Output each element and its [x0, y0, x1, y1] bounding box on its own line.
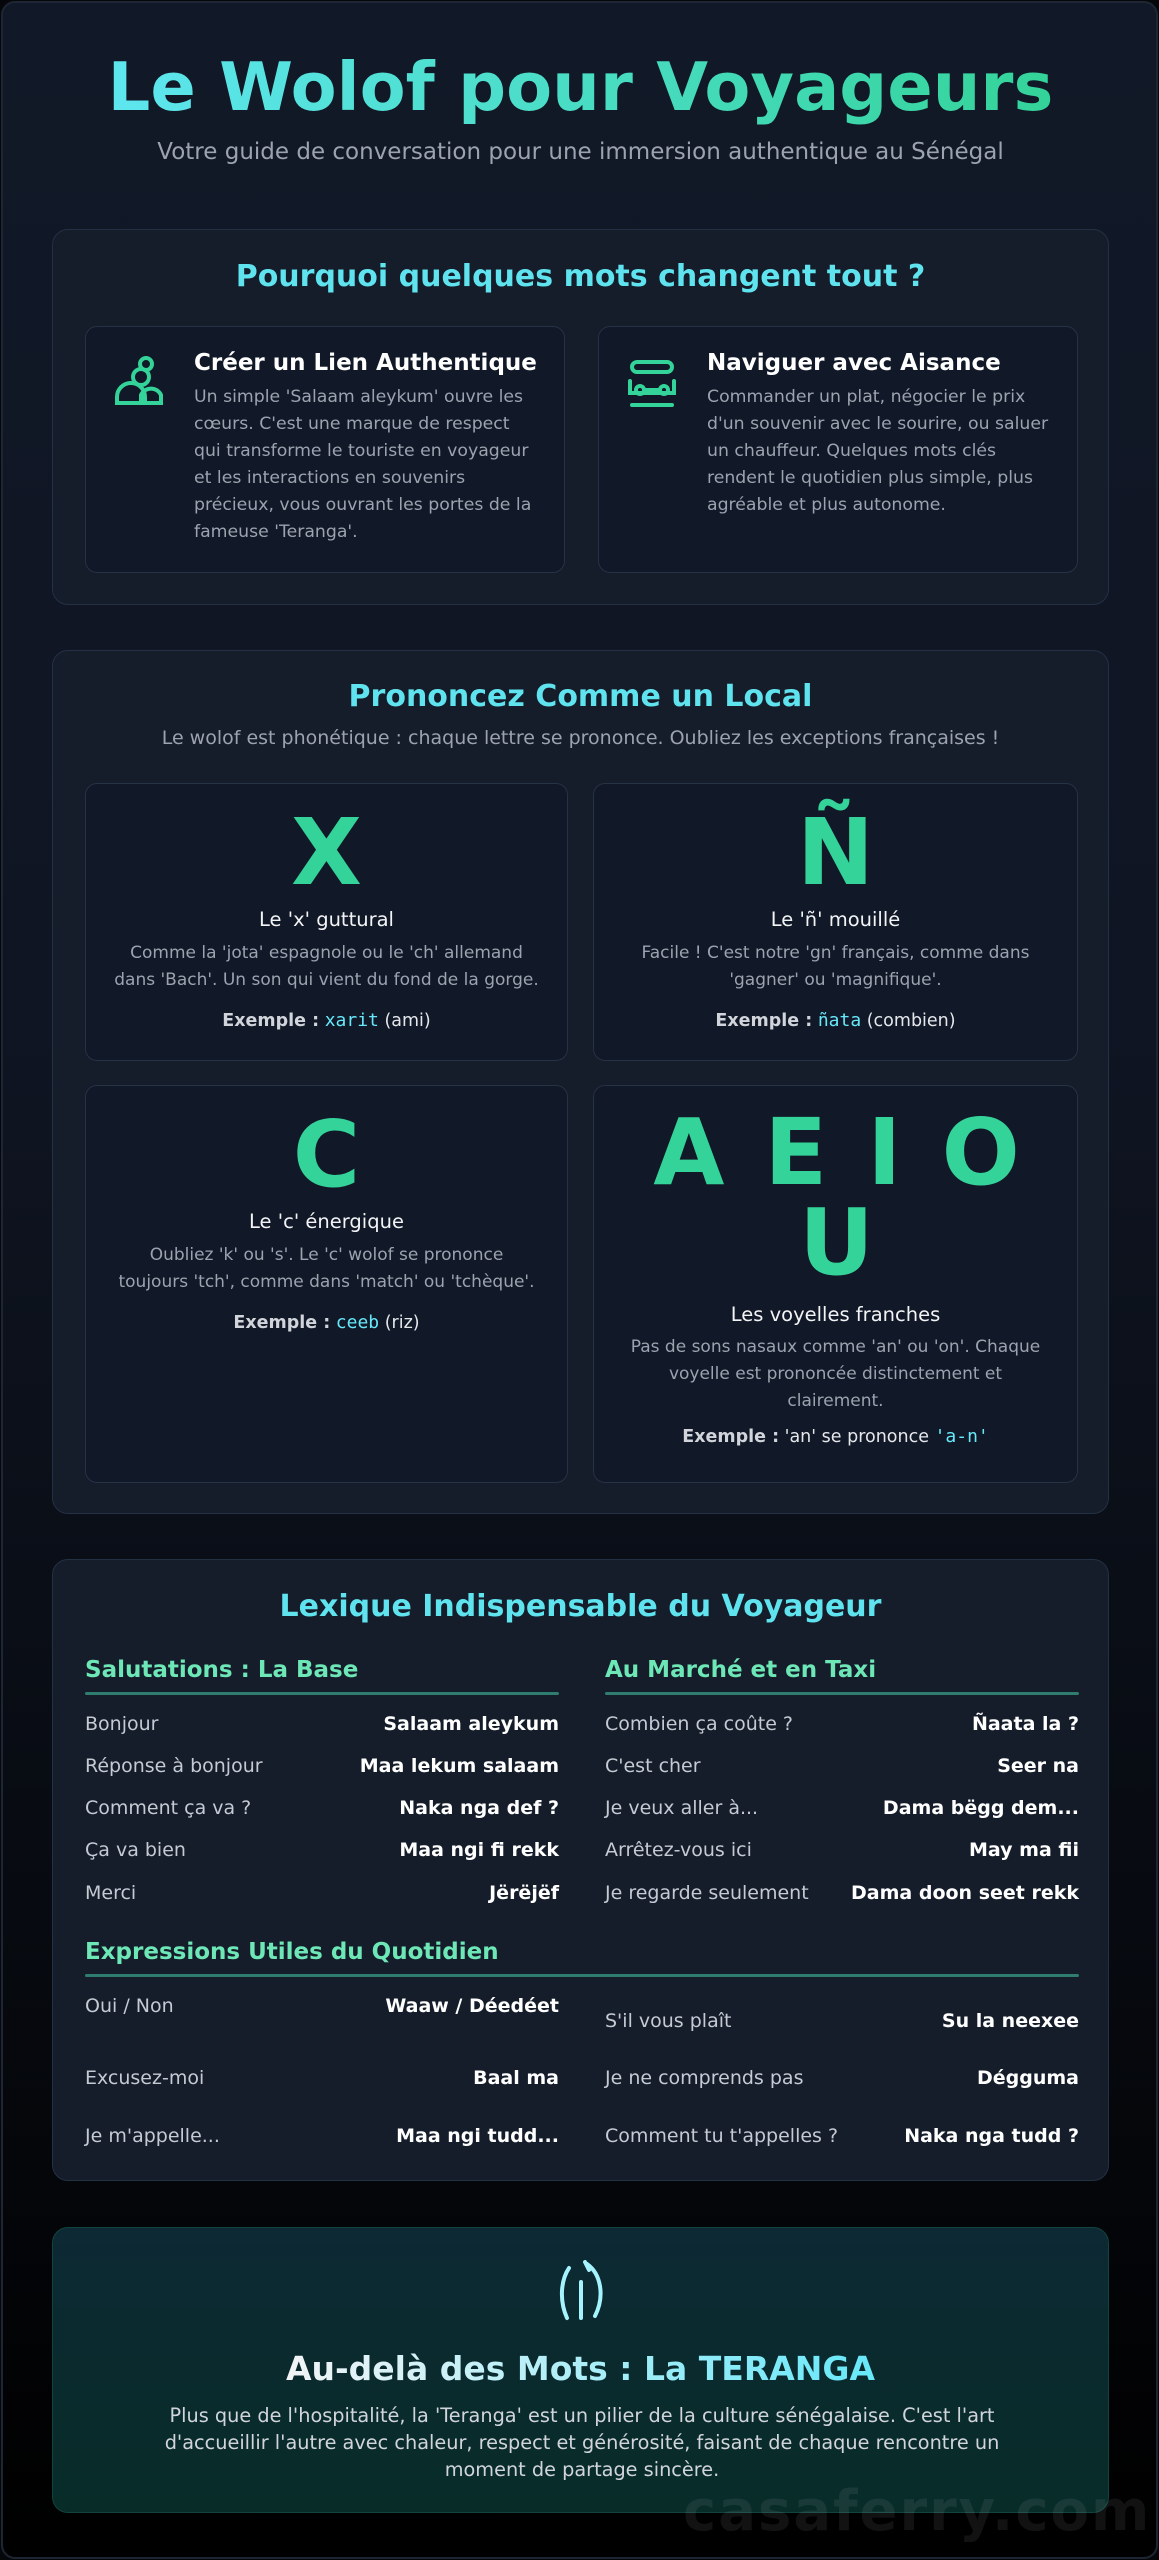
- description: Oubliez 'k' ou 's'. Le 'c' wolof se prononce: [150, 1245, 503, 1265]
- heading: teranga: Au-delà des Mots : La TERANGA: [286, 2349, 875, 2388]
- row: [605, 2010, 1079, 2032]
- letter C: C: [293, 1101, 360, 1208]
- row: [85, 1995, 559, 2017]
- row: [604, 2067, 1079, 2089]
- panel: teranga: [52, 2227, 1109, 2513]
- icon: teranga: [560, 2260, 603, 2320]
- row: C'est cher: [605, 1755, 701, 1777]
- row: S'il vous plaît: [605, 2010, 731, 2032]
- row: Comment tu t'appelles ?: [605, 2125, 838, 2147]
- row: [605, 1755, 1079, 1777]
- panel: pourquoi: [52, 229, 1109, 605]
- example: Exemple : 'an' se prononce 'a-n': [682, 1426, 989, 1447]
- subheading: Expressions Utiles du Quotidien: [85, 1939, 499, 1965]
- row: Waaw / Déedéet: [385, 1995, 559, 2017]
- text: teranga: Plus que de l'hospitalité, la 'Teranga' est un pilier de la culture sénégalaise. C'est l'art d'accueillir l'autre avec chaleur, respect et générosité, faisant de chaque rencontre un moment de partage sincère.: [165, 2404, 999, 2481]
- row: Arrêtez-vous ici: [605, 1839, 752, 1861]
- letter X: X: [291, 799, 362, 906]
- row: [85, 1755, 559, 1777]
- row: Ça va bien: [85, 1839, 186, 1861]
- subheading: Salutations : La Base: [85, 1657, 358, 1683]
- card text: Commander un plat, négocier le prix d'un souvenir avec le sourire, ou saluer un chauffeur. Quelques mots clés rendent le quotidien plus simple, plus agréable et plus autonome.: [707, 387, 1048, 515]
- heading: pourquoi: Pourquoi quelques mots changent tout ?: [236, 259, 925, 294]
- card: naviguer: [598, 326, 1078, 573]
- card heading: Naviguer avec Aisance: [707, 350, 1001, 376]
- heading: lexique: Lexique Indispensable du Voyageur: [280, 1589, 881, 1624]
- row: Seer na: [997, 1755, 1079, 1777]
- row: [85, 1713, 559, 1735]
- row: [605, 2125, 1079, 2147]
- row: [84, 2125, 559, 2147]
- title: Le Wolof pour Voyageurs: [108, 48, 1053, 126]
- row: [605, 1712, 1079, 1735]
- row: Ñaata la ?: [972, 1713, 1079, 1735]
- row: Salaam aleykum: [383, 1713, 559, 1735]
- card text: Un simple 'Salaam aleykum' ouvre les cœurs. C'est une marque de respect qui transforme le touriste en voyageur et les interactions en souvenirs précieux, vous ouvrant les portes de la fameuse 'Teranga'.: [194, 387, 531, 542]
- panel: prononciation: [52, 650, 1109, 1514]
- card heading: Créer un Lien Authentique: [194, 350, 537, 376]
- row: Excusez-moi: [85, 2067, 204, 2089]
- card: Ñ: [593, 783, 1078, 1061]
- card: C: [85, 1085, 568, 1483]
- row: [605, 1839, 1079, 1861]
- row: [604, 1882, 1080, 1904]
- letter Ñ: Ñ: [797, 799, 874, 906]
- description: toujours 'tch', comme dans 'match' ou 'tchèque'.: [118, 1272, 535, 1292]
- row: May ma fii: [969, 1839, 1079, 1861]
- watermark: casaferry.com: [683, 2479, 1151, 2544]
- column: salutations: [85, 1657, 560, 1904]
- row: Jërëjëf: [489, 1882, 559, 1904]
- description: [118, 1245, 535, 1292]
- icon: people: [115, 356, 163, 405]
- row: Naka nga tudd ?: [904, 2125, 1079, 2147]
- panel: lexique: [52, 1559, 1109, 2181]
- subheading: Au Marché et en Taxi: [605, 1657, 876, 1683]
- row: Baal ma: [473, 2067, 559, 2089]
- row: Merci: [85, 1882, 136, 1904]
- row: Réponse à bonjour: [85, 1755, 263, 1777]
- label: Le 'c' énergique: [249, 1210, 404, 1233]
- subtitle: Votre guide de conversation pour une immersion authentique au Sénégal: [157, 139, 1004, 165]
- row: Dama doon seet rekk: [851, 1882, 1079, 1904]
- card: X: [85, 783, 568, 1061]
- label: Les voyelles franches: [731, 1303, 940, 1326]
- subtitle: phonétique: Le wolof est phonétique : chaque lettre se prononce. Oubliez les exceptions françaises !: [162, 727, 999, 749]
- row: Combien ça coûte ?: [605, 1713, 793, 1735]
- row: Je regarde seulement: [605, 1882, 809, 1904]
- row: Su la neexee: [942, 2010, 1079, 2032]
- row: Maa lekum salaam: [360, 1755, 559, 1777]
- row: Maa ngi tudd...: [396, 2125, 559, 2147]
- icon: taxi: [628, 360, 676, 407]
- description: Comme la 'jota' espagnole ou le 'ch' allemand dans 'Bach'. Un son qui vient du fond de la gorge.: [114, 943, 539, 990]
- row: Dama bëgg dem...: [883, 1797, 1079, 1819]
- row: Dégguma: [977, 2067, 1079, 2089]
- row: [604, 1797, 1079, 1819]
- row: [85, 1882, 560, 1904]
- row: [85, 1839, 560, 1861]
- example: Exemple : ceeb (riz): [233, 1312, 420, 1333]
- row: [85, 2067, 559, 2089]
- heading: prononcez: Prononcez Comme un Local: [349, 679, 812, 714]
- column: marché: [604, 1657, 1080, 1904]
- row: [85, 1797, 559, 1819]
- label: Le 'ñ' mouillé: [771, 908, 900, 931]
- row: Maa ngi fi rekk: [399, 1839, 559, 1861]
- example: Exemple : ñata (combien): [715, 1010, 956, 1031]
- card: voyelles: [593, 1085, 1078, 1483]
- section: expressions: [84, 1939, 1079, 2147]
- row: Comment ça va ?: [85, 1797, 251, 1819]
- row: Je ne comprends pas: [605, 2067, 803, 2089]
- row: Je m'appelle...: [85, 2125, 220, 2147]
- row: Oui / Non: [85, 1995, 174, 2017]
- row: Naka nga def ?: [399, 1797, 559, 1819]
- row: Bonjour: [85, 1713, 158, 1735]
- description: Pas de sons nasaux comme 'an' ou 'on'. Chaque voyelle est prononcée distinctement et clairement.: [631, 1337, 1040, 1411]
- letters AEIOU: A E I O U: [653, 1099, 1020, 1296]
- example: Exemple : xarit (ami): [222, 1010, 431, 1031]
- card: lien authentique: [85, 326, 565, 573]
- row: Je veux aller à...: [605, 1797, 758, 1819]
- label: Le 'x' guttural: [259, 908, 394, 931]
- description: Facile ! C'est notre 'gn' français, comme dans 'gagner' ou 'magnifique'.: [642, 943, 1029, 990]
